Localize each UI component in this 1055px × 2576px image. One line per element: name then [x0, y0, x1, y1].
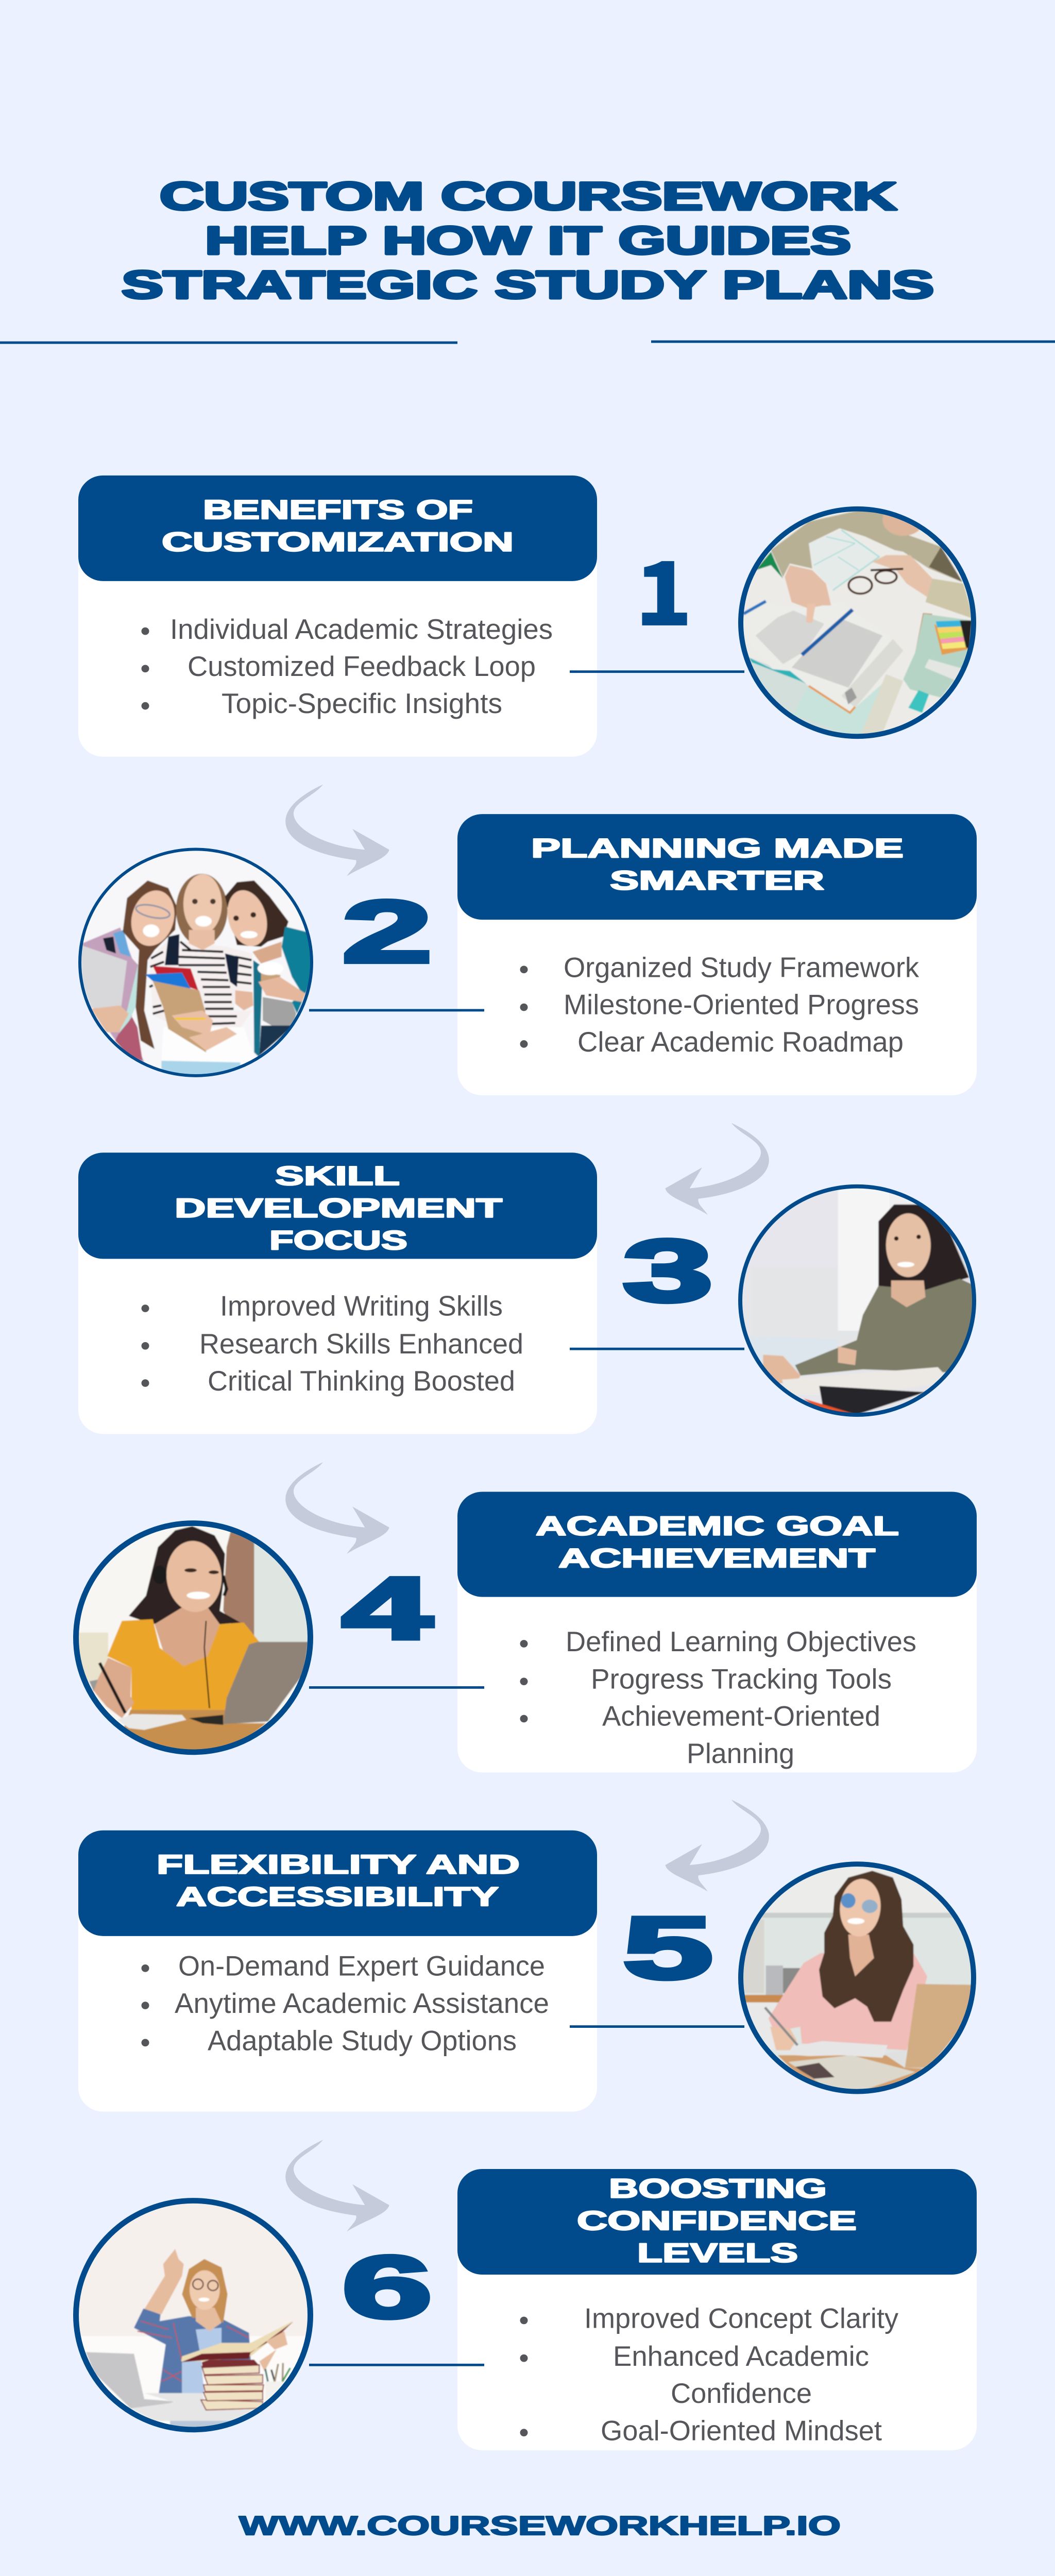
panel 4 bullet list — [520, 1626, 916, 1769]
connector 5 — [570, 2025, 744, 2028]
panel 4 header: ACADEMIC GOAL — [536, 1512, 899, 1541]
panel 6: boosting confidence levels — [457, 2169, 977, 2450]
arrow 4 to 5 — [665, 1800, 769, 1891]
panel 1: benefits of customization — [78, 476, 597, 757]
panel 6 bullet list: Enhanced Academic — [613, 2340, 869, 2372]
number 2: 2 — [342, 882, 432, 981]
arrow 2 to 3 — [665, 1123, 769, 1215]
connector 4 — [309, 1686, 484, 1689]
panel 1 bullet list: Topic-Specific Insights — [222, 687, 502, 719]
arrow 3 to 4 — [285, 1462, 389, 1554]
title — [122, 175, 934, 307]
panel 5 bullet list — [141, 1950, 549, 2056]
panel 3 header: FOCUS — [269, 1226, 407, 1256]
photo 2: three laughing students — [72, 843, 319, 1084]
panel 5 bullet list: On-Demand Expert Guidance — [178, 1950, 545, 1981]
panel 6 bullet list: Confidence — [671, 2378, 812, 2409]
arrow 5 to 6 — [285, 2140, 389, 2232]
panel 2 bullet list: Organized Study Framework — [564, 952, 919, 983]
panel 3 bullet list: Research Skills Enhanced — [199, 1328, 523, 1360]
panel 4 bullet list: Planning — [687, 1737, 794, 1769]
number 6: 6 — [342, 2238, 432, 2336]
panel 1 header — [78, 476, 597, 581]
panel 6 bullet list: Goal-Oriented Mindset — [601, 2415, 882, 2446]
panel 3 bullet list: Improved Writing Skills — [220, 1290, 503, 1322]
photo 1: desk with open book — [731, 503, 979, 744]
title: CUSTOM COURSEWORK — [160, 175, 897, 218]
photo 4: woman with headset and laptop — [72, 1517, 319, 1758]
panel 5: flexibility and accessibility — [78, 1831, 597, 2112]
panel 4 bullet list: Achievement-Oriented — [602, 1700, 880, 1732]
panel 2 bullet list — [520, 952, 919, 1058]
number 1: 1 — [635, 523, 693, 651]
panel 4 bullet list: Progress Tracking Tools — [591, 1663, 892, 1694]
panel 3 header: DEVELOPMENT — [175, 1194, 502, 1223]
panel 2: planning made smarter — [457, 814, 977, 1095]
panel 1 bullet list — [141, 614, 553, 719]
panel 5 header: ACCESSIBILITY — [176, 1883, 499, 1912]
number 4: 4 — [342, 1559, 432, 1657]
footer url: WWW.COURSEWORKHELP.IO — [239, 2511, 841, 2541]
panel 3 bullet list: Critical Thinking Boosted — [208, 1365, 515, 1397]
panel 5 header — [78, 1831, 597, 1936]
connector 3 — [570, 1348, 744, 1350]
panel 2 bullet list: Clear Academic Roadmap — [577, 1026, 904, 1058]
panel 2 header: SMARTER — [610, 866, 824, 895]
panel 1 header: CUSTOMIZATION — [162, 528, 514, 557]
panel 3 header: SKILL — [275, 1161, 400, 1191]
arrow 1 to 2 — [285, 785, 389, 876]
panel 2 header: PLANNING MADE — [531, 834, 904, 863]
panel 5 bullet list: Adaptable Study Options — [208, 2025, 517, 2056]
panel 1 bullet list: Customized Feedback Loop — [188, 651, 536, 682]
number 5: 5 — [623, 1899, 713, 1997]
panel 6 header: CONFIDENCE — [577, 2207, 857, 2236]
photo 6: student pointing up with books — [72, 2194, 319, 2437]
panel 6 header: LEVELS — [637, 2239, 798, 2268]
panel 2 bullet list: Milestone-Oriented Progress — [564, 989, 919, 1021]
panel 6 bullet list: Improved Concept Clarity — [584, 2302, 898, 2334]
panel 4 header — [457, 1492, 977, 1597]
photo 3: woman at desk with books — [731, 1180, 979, 1421]
panel 1 header: BENEFITS OF — [203, 495, 473, 525]
photo 5: woman in pink sweater writing — [731, 1859, 979, 2100]
title: STRATEGIC STUDY PLANS — [122, 263, 934, 307]
panel 4: academic goal achievement — [457, 1492, 977, 1772]
panel 6 header: BOOSTING — [609, 2174, 827, 2204]
panel 4 bullet list: Defined Learning Objectives — [566, 1626, 916, 1657]
panel 1 bullet list: Individual Academic Strategies — [170, 614, 553, 645]
panel 3 bullet list — [141, 1290, 523, 1397]
panel 5 header: FLEXIBILITY AND — [157, 1850, 520, 1880]
panel 2 header — [457, 814, 977, 920]
panel 6 bullet list — [520, 2302, 898, 2446]
title: HELP HOW IT GUIDES — [205, 219, 851, 263]
panel 4 header: ACHIEVEMENT — [558, 1544, 875, 1573]
number 3: 3 — [623, 1221, 713, 1320]
panel 3 header — [78, 1153, 597, 1259]
connector 1 — [570, 670, 744, 673]
panel 3: skill development focus — [78, 1153, 597, 1434]
panel 6 header — [457, 2169, 977, 2275]
connector 2 — [309, 1009, 484, 1011]
connector 6 — [309, 2364, 484, 2366]
panel 5 bullet list: Anytime Academic Assistance — [175, 1988, 549, 2019]
